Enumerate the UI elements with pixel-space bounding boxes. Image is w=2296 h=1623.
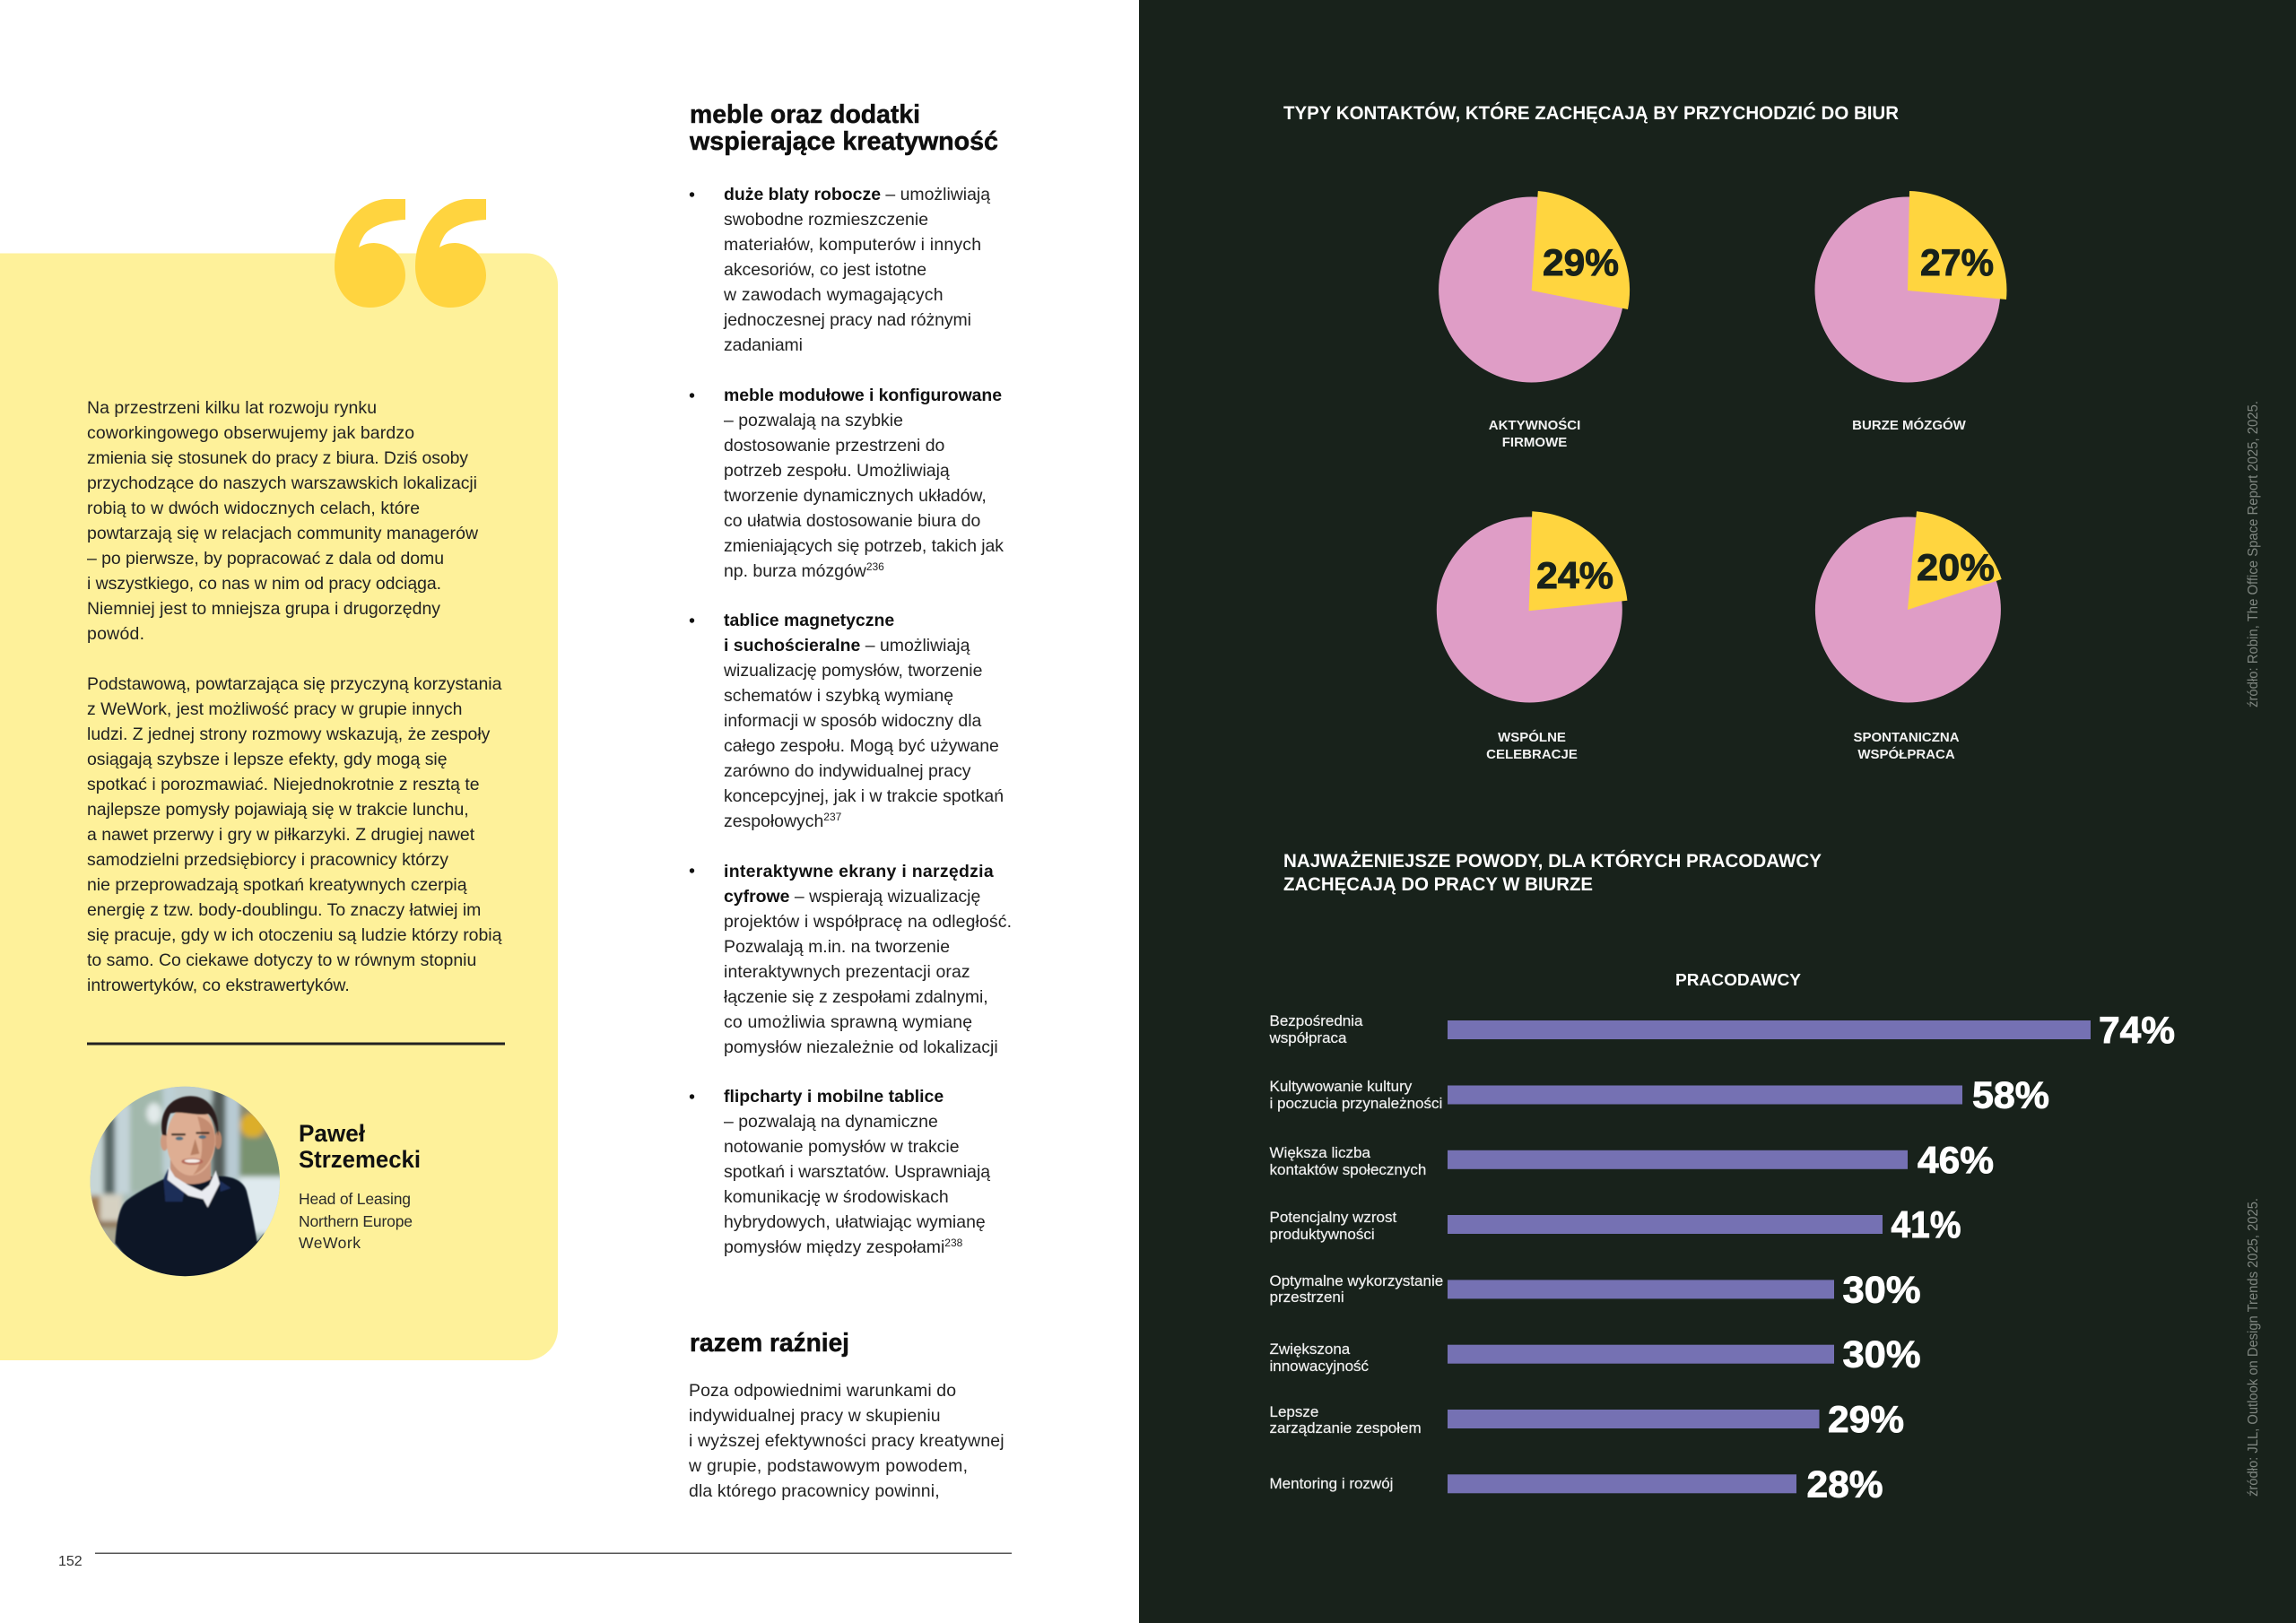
bar: wzrost produktywności 41%: Potencjalny wzrost	[1270, 1209, 1397, 1226]
quote text: zmienia się stosunek do pracy z biura. Dziś osoby	[87, 448, 468, 468]
list: furniture items: – pozwalają na szybkie	[724, 411, 903, 430]
list: furniture items: notowanie pomysłów w trakcie	[724, 1137, 960, 1157]
bar: wykorzystanie przestrzeni 30%: przestrzeni	[1270, 1289, 1344, 1306]
list: furniture items: 237	[823, 811, 842, 823]
icon: quotation marks	[335, 199, 486, 308]
heading: meble oraz dodatki: wspierające kreatywność	[689, 127, 998, 156]
list: furniture items: np. burza mózgów	[724, 561, 867, 581]
bar: kultywowanie kultury 58%	[1270, 1074, 2049, 1115]
pie chart: aktywności firmowe	[1439, 191, 1630, 450]
quote text: spotkać i porozmawiać. Niejednokrotnie z resztą te	[87, 775, 480, 794]
quote text: a nawet przerwy i gry w piłkarzyki. Z drugiej nawet	[87, 825, 475, 845]
heading: employer reasons: ZACHĘCAJĄ DO PRACY W BIURZE	[1283, 874, 1593, 895]
list: furniture items: 236	[866, 560, 884, 573]
bar: wzrost produktywności 41%	[1270, 1203, 1961, 1245]
pie chart: burze mózgów: 27%	[1920, 241, 1994, 283]
quote text: przychodzące do naszych warszawskich lokalizacji	[87, 473, 477, 493]
body paragraph: razem raźniej: indywidualnej pracy w skupieniu	[689, 1406, 941, 1426]
list: furniture items: hybrydowych, ułatwiając wymianę	[724, 1212, 986, 1232]
body paragraph: razem raźniej: w grupie, podstawowym powodem,	[688, 1456, 968, 1476]
list: furniture items: Pozwalają m.in. na tworzenie	[724, 937, 950, 957]
bar: kontakty społeczne 46%	[1270, 1139, 1994, 1181]
panel: quote	[0, 199, 558, 1360]
quote text: samodzielni przedsiębiorcy i pracownicy którzy	[87, 850, 448, 870]
job title: Northern Europe	[299, 1212, 413, 1230]
list: furniture items: w zawodach wymagających	[723, 285, 944, 305]
bar: innowacyjność 30%	[1270, 1333, 1921, 1376]
pie chart: spontaniczna współpraca: SPONTANICZNA	[1853, 730, 1960, 745]
bar: mentoring i rozwój 28%: Mentoring i rozwój	[1270, 1475, 1393, 1492]
list: furniture items: schematów i szybką wymianę	[724, 686, 953, 706]
list: furniture items: flipcharty i mobilne tablice	[724, 1087, 944, 1107]
job title: WeWork	[299, 1234, 361, 1252]
list: furniture items: zarówno do indywidualnej pracy	[724, 761, 971, 781]
bar: kultywowanie kultury 58%: Kultywowanie kultury	[1270, 1078, 1413, 1095]
list: furniture items: – umożliwiają	[860, 636, 970, 655]
bar: zarządzanie zespołem 29%: 29%	[1828, 1398, 1904, 1440]
list: furniture items: informacji w sposób widoczny dla	[724, 711, 982, 731]
list: furniture items: interaktywne ekrany i narzędzia	[724, 862, 994, 881]
list: furniture items: dostosowanie przestrzeni do	[724, 436, 944, 456]
bar: wzrost produktywności 41%: produktywności	[1270, 1226, 1375, 1243]
list: furniture items: tworzenie dynamicznych układów,	[724, 486, 987, 506]
pie chart: burze mózgów	[1815, 191, 2006, 433]
list: furniture items: pomysłów między zespołami	[724, 1237, 944, 1257]
pie chart: wspólne celebracje: WSPÓLNE	[1498, 729, 1566, 745]
list: furniture items: materiałów, komputerów i innych	[724, 235, 981, 255]
bar: zarządzanie zespołem 29%: zarządzanie zespołem	[1270, 1419, 1422, 1436]
list: furniture items: spotkań i warsztatów. Usprawniają	[724, 1162, 990, 1182]
list: furniture items: i suchościeralne	[724, 636, 861, 655]
bar: kontakty społeczne 46%: 46%	[1918, 1139, 1994, 1181]
list: furniture items: wizualizację pomysłów, tworzenie	[723, 661, 982, 681]
list: furniture items: komunikację w środowiskach	[724, 1187, 949, 1207]
quote text: Niemniej jest to mniejsza grupa i drugorzędny	[87, 599, 440, 619]
heading: meble oraz dodatki: meble oraz dodatki	[690, 100, 920, 129]
list: furniture items: co ułatwia dostosowanie biura do	[724, 511, 980, 531]
name: Strzemecki	[299, 1146, 421, 1173]
list: furniture items: – wspierają wizualizację	[789, 887, 980, 907]
list: furniture items: pomysłów niezależnie od lokalizacji	[724, 1037, 998, 1057]
bar: kultywowanie kultury 58%: i poczucia przynależności	[1270, 1095, 1442, 1112]
bar: zarządzanie zespołem 29%	[1270, 1398, 1904, 1440]
footer: page number and rule: 152	[58, 1554, 83, 1569]
quote text: powód.	[87, 624, 144, 644]
portrait photo	[90, 1087, 280, 1277]
bar: wykorzystanie przestrzeni 30%: Optymalne wykorzystanie	[1270, 1272, 1443, 1289]
list: furniture items: jednoczesnej pracy nad różnymi	[723, 310, 971, 330]
bar: bezpośrednia współpraca 74%: 74%	[2099, 1009, 2175, 1051]
list: furniture items: potrzeb zespołu. Umożliwiają	[724, 461, 950, 481]
bar: wykorzystanie przestrzeni 30%	[1270, 1268, 1921, 1310]
pie chart: burze mózgów: BURZE MÓZGÓW	[1852, 417, 1967, 433]
list: furniture items: akcesoriów, co jest istotne	[724, 260, 926, 280]
quote text: coworkingowego obserwujemy jak bardzo	[87, 423, 414, 443]
job title: Head of Leasing	[299, 1190, 411, 1208]
pie chart: wspólne celebracje: 24%	[1536, 554, 1613, 596]
list: furniture items: łączenie się z zespołami zdalnymi,	[724, 987, 988, 1007]
list: furniture items: interaktywnych prezentacji oraz	[724, 962, 970, 982]
quote text: introwertyków, co ekstrawertyków.	[87, 976, 350, 995]
chart heading: pracodawcy: PRACODAWCY	[1675, 971, 1801, 989]
bar: mentoring i rozwój 28%	[1270, 1462, 1883, 1505]
quote text: się pracuje, gdy w ich otoczeniu są ludzie którzy robią	[87, 925, 502, 945]
list: furniture items: tablice magnetyczne	[724, 611, 894, 630]
quote text: Na przestrzeni kilku lat rozwoju rynku	[87, 398, 377, 418]
body paragraph: razem raźniej: Poza odpowiednimi warunkami do	[689, 1381, 956, 1401]
list: furniture items: duże blaty robocze	[724, 185, 881, 204]
list: furniture items: – umożliwiają	[881, 185, 990, 204]
bar: zarządzanie zespołem 29%: Lepsze	[1270, 1403, 1318, 1420]
pie chart: spontaniczna współpraca: 20%	[1917, 546, 1995, 588]
list: furniture items: całego zespołu. Mogą być używane	[724, 736, 999, 756]
name: Paweł	[299, 1120, 365, 1147]
heading: contact types: TYPY KONTAKTÓW, KTÓRE ZACHĘCAJĄ BY PRZYCHODZIĆ DO BIUR	[1283, 102, 1899, 124]
bar: kultywowanie kultury 58%: 58%	[1972, 1074, 2049, 1115]
quote text: – po pierwsze, by popracować z dala od domu	[87, 549, 444, 568]
bar: innowacyjność 30%: 30%	[1842, 1333, 1921, 1376]
list: furniture items: 238	[944, 1237, 963, 1249]
pie chart: aktywności firmowe: 29%	[1543, 241, 1619, 283]
pie chart: aktywności firmowe: FIRMOWE	[1502, 435, 1567, 450]
list: furniture items: – pozwalają na dynamiczne	[724, 1112, 938, 1132]
pie chart: aktywności firmowe: AKTYWNOŚCI	[1489, 417, 1580, 433]
bar: mentoring i rozwój 28%: 28%	[1806, 1462, 1883, 1505]
heading: employer reasons: NAJWAŻENIEJSZE POWODY, DLA KTÓRYCH PRACODAWCY	[1283, 850, 1822, 872]
body paragraph: razem raźniej: dla którego pracownicy powinni,	[689, 1481, 940, 1501]
list: furniture items: meble modułowe i konfigurowane	[724, 386, 1002, 405]
bar: innowacyjność 30%: innowacyjność	[1270, 1358, 1370, 1375]
list: furniture items: co umożliwia sprawną wymianę	[724, 1012, 972, 1032]
pie chart: spontaniczna współpraca	[1815, 511, 2002, 762]
bar chart: employer reasons	[1268, 1009, 2175, 1505]
source note: Robin: źródło: Robin, The Office Space Report 2025, 2025.	[2246, 401, 2261, 707]
bar: innowacyjność 30%: Zwiększona	[1270, 1341, 1351, 1358]
quote text: Podstawową, powtarzająca się przyczyną korzystania	[87, 674, 502, 694]
bar: kontakty społeczne 46%: Większa liczba	[1270, 1144, 1370, 1161]
pie chart: wspólne celebracje: CELEBRACJE	[1486, 747, 1578, 762]
quote text: powtarzają się w relacjach community managerów	[87, 524, 479, 543]
text column: furniture	[688, 100, 1017, 1501]
list: furniture items: zadaniami	[724, 335, 803, 355]
list: furniture items: zmieniających się potrzeb, takich jak	[724, 536, 1004, 556]
bar: bezpośrednia współpraca 74%: Bezpośrednia	[1270, 1012, 1363, 1029]
bar: wykorzystanie przestrzeni 30%: 30%	[1842, 1268, 1921, 1310]
bar: wzrost produktywności 41%: 41%	[1891, 1203, 1961, 1245]
list: furniture items: zespołowych	[724, 812, 823, 831]
heading: razem raźniej: razem raźniej	[690, 1329, 849, 1358]
list: furniture items: koncepcyjnej, jak i w trakcie spotkań	[724, 786, 1004, 806]
quote text: najlepsze pomysły pojawiają się w trakcie lunchu,	[87, 800, 469, 820]
quote text: z WeWork, jest możliwość pracy w grupie innych	[87, 699, 462, 719]
panel: dark charts background	[1139, 0, 2296, 1623]
body paragraph: razem raźniej: i wyższej efektywności pracy kreatywnej	[689, 1431, 1004, 1451]
bar: kontakty społeczne 46%: kontaktów społecznych	[1270, 1161, 1426, 1178]
quote text: osiągają szybsze i lepsze efekty, gdy mogą się	[87, 750, 448, 769]
quote text: ludzi. Z jednej strony rozmowy wskazują, że zespoły	[87, 725, 491, 744]
list: furniture items	[690, 185, 1017, 1257]
quote text: nie przeprowadzają spotkań kreatywnych czerpią	[87, 875, 467, 895]
bar: bezpośrednia współpraca 74%: współpraca	[1268, 1029, 1347, 1046]
list: furniture items: cyfrowe	[724, 887, 790, 907]
quote text: i wszystkiego, co nas w nim od pracy odciąga.	[87, 574, 441, 594]
quote text: robią to w dwóch widocznych celach, które	[87, 499, 420, 518]
list: furniture items: projektów i współpracę na odległość.	[724, 912, 1012, 932]
source note: JLL: źródło: JLL, Outlook on Design Trends 2025, 2025.	[2246, 1198, 2261, 1497]
quote text: to samo. Co ciekawe dotyczy to w równym stopniu	[87, 950, 476, 970]
quote text: energię z tzw. body-doublingu. To znaczy łatwiej im	[87, 900, 481, 920]
list: furniture items: swobodne rozmieszczenie	[724, 210, 928, 230]
pie chart: wspólne celebracje	[1437, 511, 1627, 762]
pie chart: spontaniczna współpraca: WSPÓŁPRACA	[1857, 746, 1955, 762]
bar: bezpośrednia współpraca 74%	[1268, 1009, 2175, 1051]
